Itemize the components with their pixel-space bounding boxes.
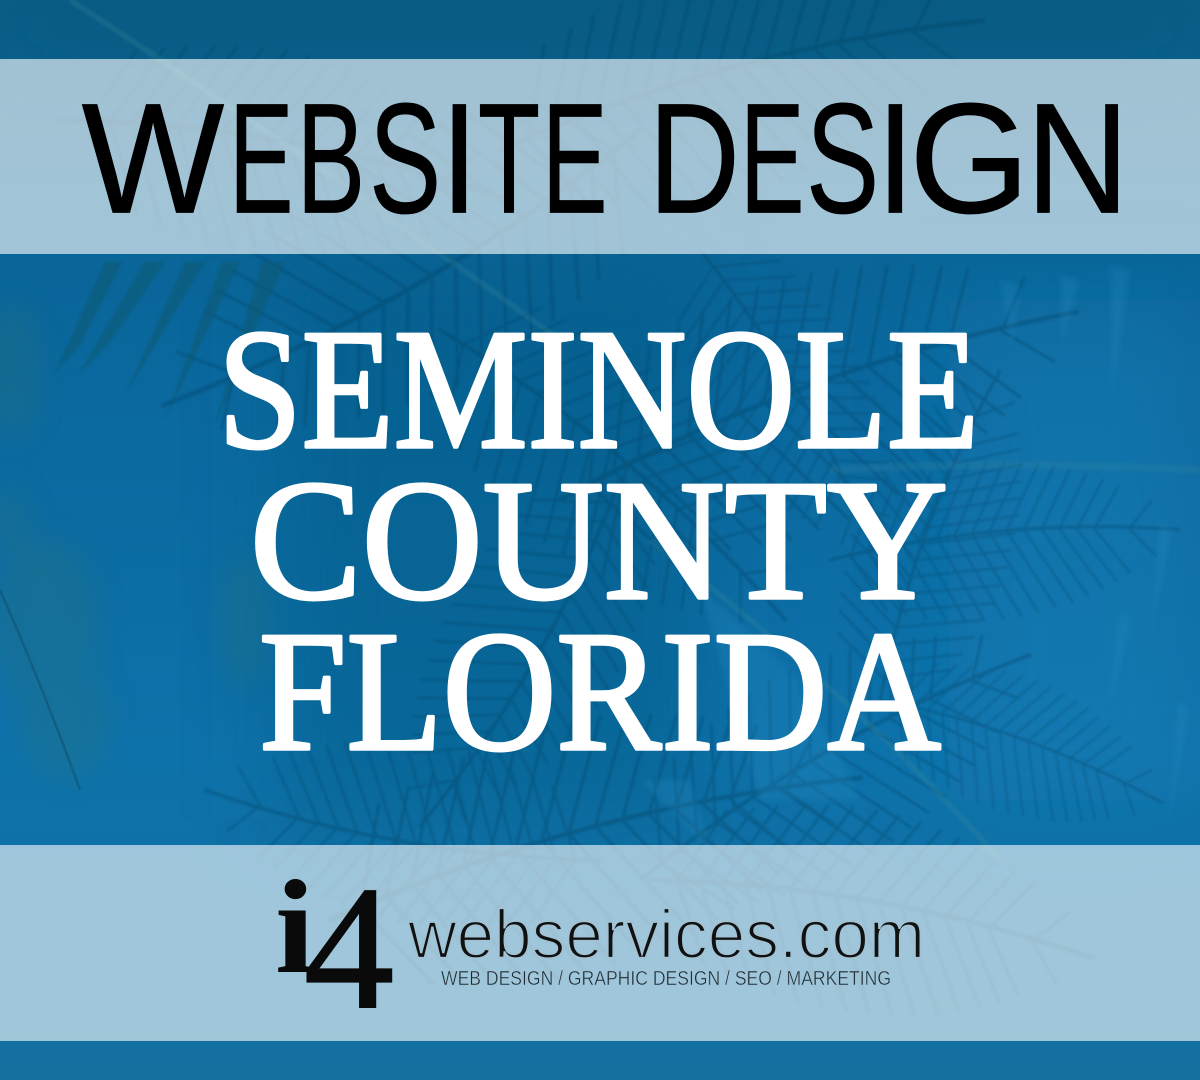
heading: website design: E [542, 72, 608, 246]
logo wordmark: webservices.com [407, 896, 925, 973]
heading: website design: I [876, 72, 914, 246]
heading: website design: S [806, 72, 879, 246]
heading: website design: E [229, 72, 293, 246]
heading: website design: G [909, 72, 1030, 246]
upper left palm leaflets [55, 262, 285, 425]
title: seminole county florida [218, 295, 979, 787]
top band [0, 59, 1200, 254]
heading: website design: S [369, 72, 441, 246]
heading: website design: W [82, 72, 224, 246]
title: seminole county florida: SEMINOLE [218, 295, 979, 485]
bottom band [0, 845, 1200, 1041]
logo mark: i4: 4 [304, 851, 394, 1046]
title: seminole county florida: COUNTY [250, 446, 948, 636]
logo mark: i4: i [275, 853, 315, 1001]
heading: website design: B [297, 72, 365, 246]
title: seminole county florida: FLORIDA [259, 597, 941, 787]
heading: website design: T [478, 72, 540, 246]
heading: website design: E [740, 72, 804, 246]
heading: website design: N [1026, 72, 1129, 246]
heading: website design: I [440, 72, 478, 246]
logo tagline: WEB DESIGN / GRAPHIC DESIGN / SEO / MARKETING [441, 968, 891, 990]
logo: i4webservices.com [275, 851, 925, 1046]
heading: website design: D [649, 72, 740, 246]
